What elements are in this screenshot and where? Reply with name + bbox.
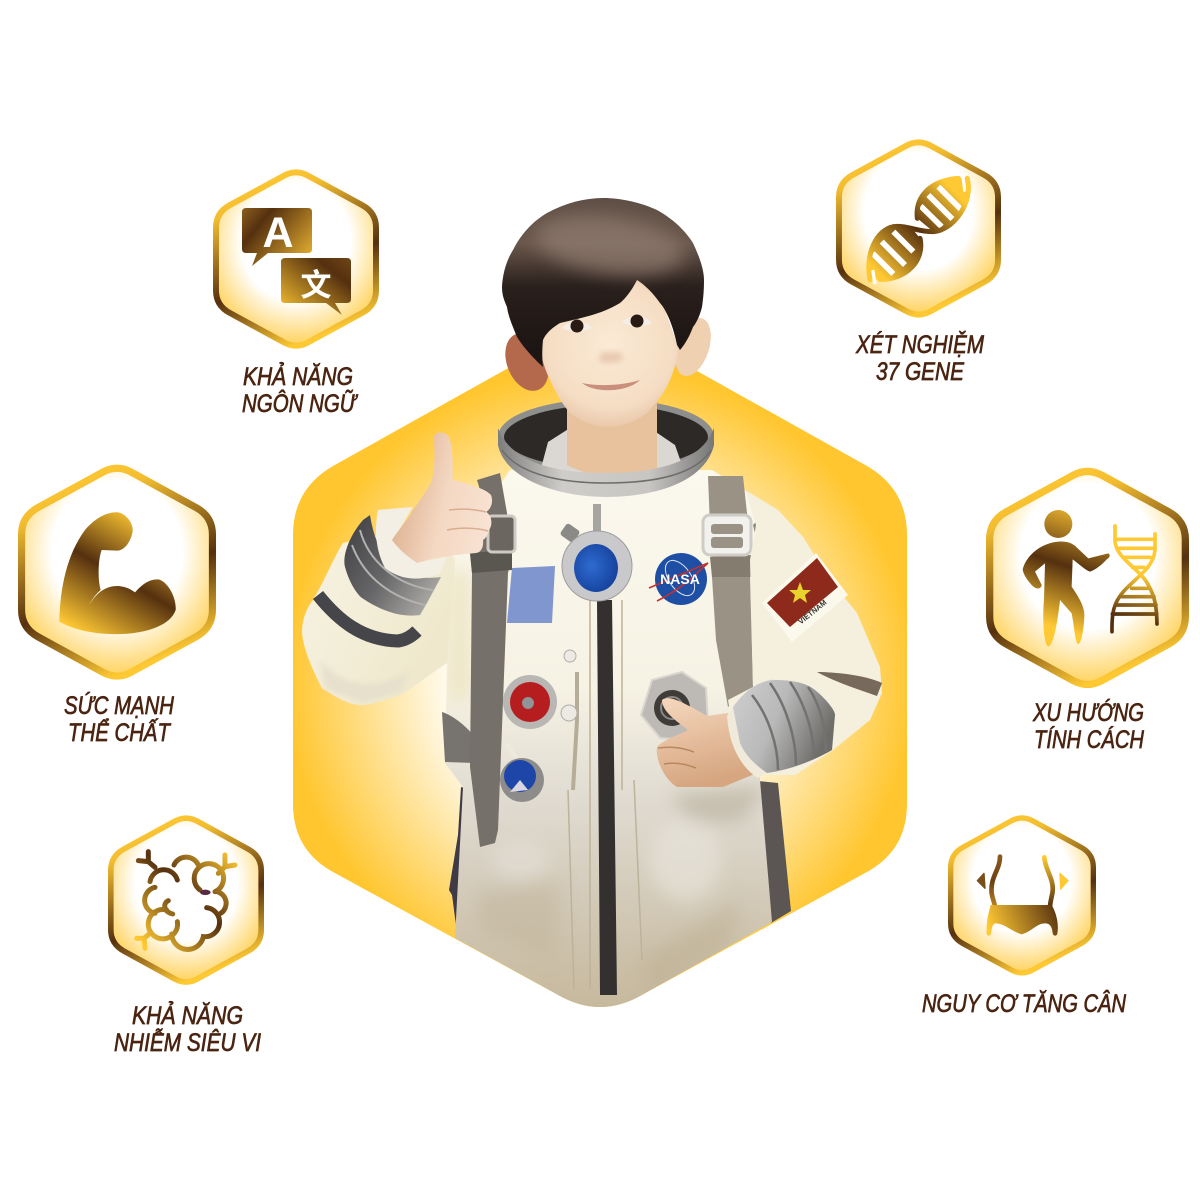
left strap [470, 473, 512, 847]
red button [503, 675, 557, 729]
silver hex button [641, 672, 708, 740]
label: THỂ CHẤT [68, 717, 171, 747]
front zipper [597, 600, 617, 995]
label: XÉT NGHIỆM [855, 330, 984, 359]
label [1032, 698, 1145, 754]
right buckle [703, 515, 751, 555]
right sleeve [728, 490, 882, 775]
label: KHẢ NĂNG [132, 999, 243, 1030]
sleeve band left [318, 595, 417, 641]
flag red field [767, 558, 838, 627]
flag patch surround [762, 553, 848, 642]
label [64, 691, 175, 747]
left buckle [488, 516, 515, 552]
card: 37 gene test [839, 142, 998, 386]
patch word: NASA [660, 571, 700, 587]
face [538, 275, 678, 427]
housing [500, 758, 544, 802]
hexagon frame [839, 142, 998, 315]
thumbs up hand [392, 432, 492, 563]
speech bubble translation [281, 258, 351, 315]
label: NHIỄM SIÊU VI [114, 1027, 261, 1057]
inner hood [540, 428, 682, 482]
flag caption: VIETNAM [796, 598, 828, 626]
card: weight gain risk [922, 818, 1127, 1018]
child in astronaut suit [302, 198, 882, 1007]
person body [1023, 541, 1110, 647]
card: personality tendency [990, 471, 1185, 754]
hexagon frame [216, 172, 376, 346]
white glove cuff [376, 507, 447, 579]
placket of suit [568, 600, 642, 990]
label: 37 GENE [876, 358, 964, 386]
speech bubble translation: 文 [300, 268, 332, 303]
hex housing [641, 672, 708, 740]
red disc [510, 682, 550, 722]
silver forearm cuff [733, 680, 835, 773]
sleeve band right [817, 672, 882, 696]
nozzle [593, 504, 601, 532]
cuff ribs left [352, 530, 433, 605]
hexagon frame [22, 468, 212, 676]
blue cap [504, 760, 536, 792]
person head [1044, 510, 1072, 538]
hexagon frame [951, 818, 1093, 973]
right strap [708, 476, 753, 707]
finger creases [447, 509, 488, 531]
left lower gray patch [442, 712, 475, 763]
hexagon frame [111, 818, 261, 982]
blue chest button [559, 504, 632, 601]
blue dome [574, 544, 618, 592]
sleeve shading [320, 660, 410, 703]
nose [598, 352, 624, 363]
hair [502, 198, 704, 367]
left ear [497, 327, 557, 397]
card: language ability [216, 172, 376, 418]
right hand [657, 698, 757, 787]
centre [522, 697, 534, 709]
person and DNA icon [1023, 510, 1157, 647]
label [855, 330, 984, 386]
right eye [622, 314, 652, 328]
collar dark lines [502, 450, 711, 483]
waist icon [977, 857, 1068, 936]
card: physical strength [22, 468, 212, 747]
housing [503, 675, 557, 729]
white mark [510, 780, 528, 792]
right ear [669, 314, 717, 380]
label: XU HƯỚNG [1032, 698, 1144, 727]
purple pill [200, 890, 211, 895]
label [242, 360, 359, 418]
helix [1112, 526, 1157, 632]
patch orbit [660, 555, 700, 601]
left strap pad [470, 550, 512, 573]
label: SỨC MẠNH [64, 691, 175, 720]
label: NGUY CƠ TĂNG CÂN [922, 989, 1127, 1018]
flag star [789, 582, 811, 603]
suit side strip left [449, 787, 472, 940]
white cuff right [727, 678, 790, 778]
speech bubble A [242, 208, 312, 266]
torso of suit [445, 470, 772, 1007]
flexed arm icon [59, 512, 176, 634]
hexagon frame [990, 471, 1185, 684]
hair highlight [532, 207, 688, 283]
cord [506, 743, 519, 762]
patch swoosh [649, 563, 708, 601]
silver housing [562, 531, 632, 601]
label: NGÔN NGỮ [242, 389, 359, 418]
white tube [561, 650, 577, 790]
central hexagon background [293, 328, 907, 1007]
side bracket [559, 523, 581, 543]
blue lower button [500, 743, 544, 802]
virus cell icon [137, 852, 235, 949]
left sleeve [302, 530, 455, 705]
label: TÍNH CÁCH [1034, 725, 1145, 754]
gray wrist cuff [344, 515, 441, 616]
Vietnam flag patch [767, 558, 838, 627]
label: KHẢ NĂNG [243, 360, 353, 391]
DNA helix icon [869, 174, 968, 284]
neck [567, 400, 657, 476]
suit side strip right [748, 780, 791, 923]
cuff ribs [752, 682, 826, 770]
speech bubble A: A [262, 209, 294, 257]
shoulder strip [753, 507, 778, 538]
fabric shading [447, 570, 770, 995]
mouth [582, 380, 640, 390]
blue pocket [507, 566, 555, 623]
finger creases right hand [658, 747, 696, 768]
left eye [562, 320, 592, 332]
right strap pad [710, 555, 752, 577]
patch disc [655, 553, 707, 605]
infographic canvas [18, 139, 1189, 1052]
card: virus infection ability [111, 818, 261, 1057]
label [114, 999, 261, 1057]
dark dial [654, 690, 690, 726]
NASA patch [649, 553, 708, 605]
collar rim and interior [501, 402, 711, 472]
collar front band [498, 428, 714, 497]
